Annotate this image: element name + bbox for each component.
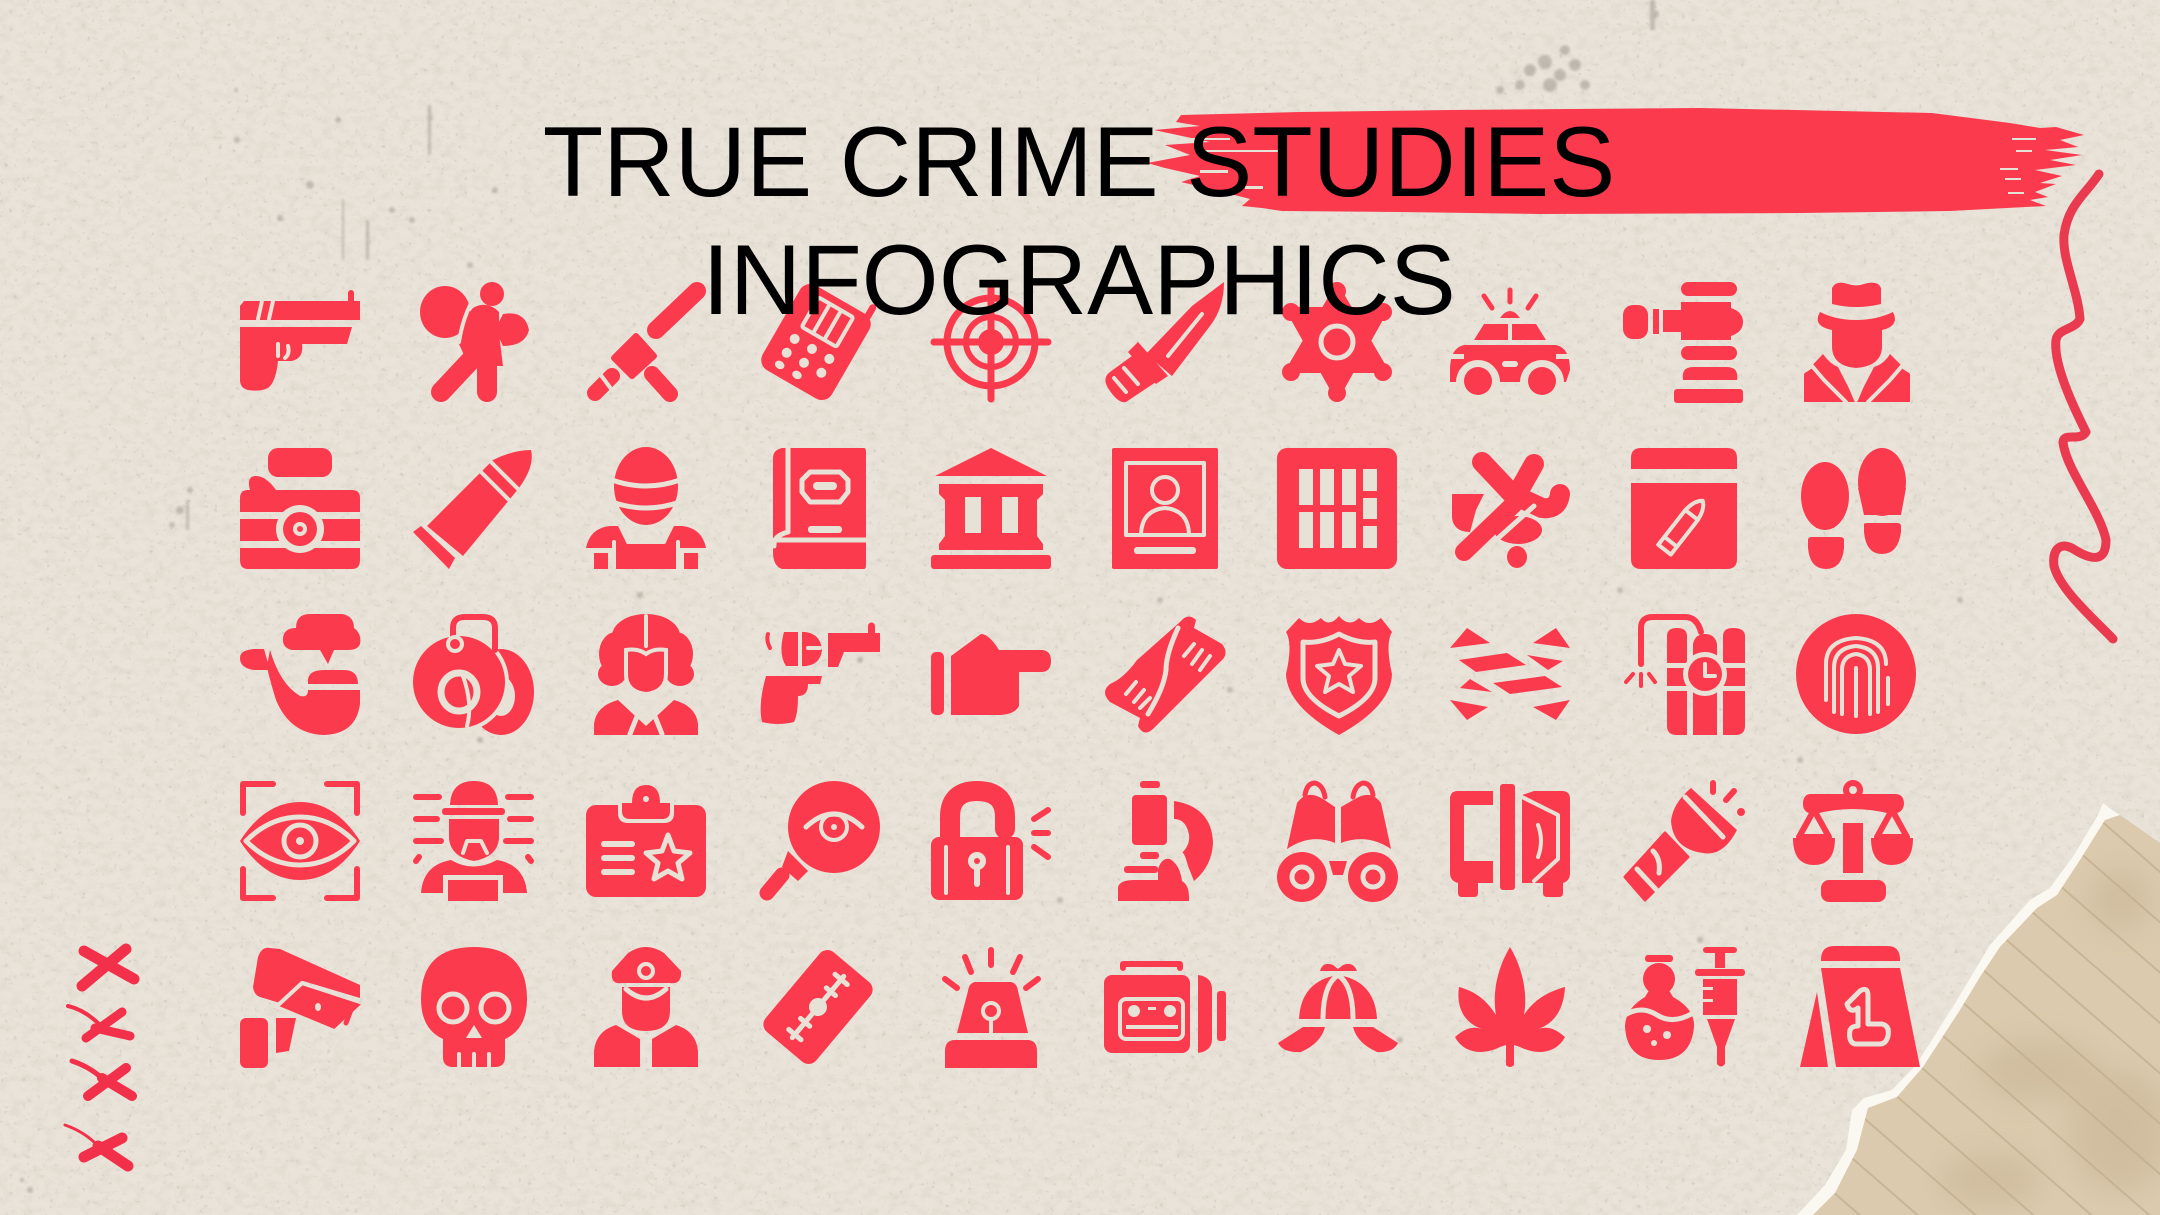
icon: judge with wig bbox=[594, 614, 698, 735]
icon: robber with sack bbox=[420, 282, 529, 392]
icon: rolled tape bbox=[1105, 616, 1226, 733]
icon: courthouse bank bbox=[931, 448, 1051, 569]
icon: crime scene tape bbox=[1450, 628, 1570, 720]
icon: alarm siren bbox=[945, 950, 1038, 1068]
icon: flashlight bbox=[1625, 783, 1745, 900]
icon: suspect portrait card bbox=[1112, 448, 1218, 569]
icon: microscope bbox=[1118, 781, 1213, 901]
icon: police baton bbox=[595, 291, 697, 394]
icon: camera bbox=[240, 448, 360, 569]
icon: footprints bbox=[1801, 448, 1906, 569]
icon: skull bbox=[421, 947, 527, 1067]
icon: jail cell bbox=[1277, 448, 1397, 569]
icon: police badge bbox=[1286, 616, 1392, 735]
icon: magnifier with eye bbox=[767, 781, 880, 893]
icon: open padlock bbox=[931, 791, 1048, 900]
red x marks bbox=[65, 949, 134, 1166]
icon: gavel bbox=[1623, 282, 1743, 403]
title: TRUE CRIME STUDIES bbox=[543, 106, 1615, 217]
icon: evidence bag with bullet bbox=[1631, 448, 1737, 569]
title bbox=[543, 106, 1615, 335]
icon: eye scan bbox=[240, 784, 360, 898]
icon: scales of justice bbox=[1793, 783, 1913, 902]
icon: open safe bbox=[1450, 784, 1570, 897]
icon: tobacco pipe and smoke bbox=[240, 614, 360, 735]
icon: law book bbox=[773, 448, 866, 569]
icon: evidence marker number one bbox=[1800, 946, 1920, 1067]
icon: razor blade bbox=[759, 946, 877, 1068]
torn notebook paper corner bbox=[1790, 800, 2160, 1215]
title brush stroke bbox=[1147, 108, 2084, 214]
icon: bullet bbox=[413, 450, 532, 569]
icon: security camera bbox=[240, 948, 360, 1068]
icon: binoculars bbox=[1277, 783, 1398, 902]
icon: detective bbox=[1804, 283, 1910, 402]
icon: detective hat bbox=[1278, 964, 1398, 1052]
icon: pistol bbox=[240, 290, 360, 391]
icon: clipboard with star bbox=[586, 785, 706, 897]
icon: knife bbox=[1105, 282, 1224, 402]
icon grid bbox=[240, 272, 1920, 1068]
icon: police car bbox=[1450, 290, 1570, 404]
title: INFOGRAPHICS bbox=[702, 224, 1456, 335]
icon: revolver bbox=[761, 622, 880, 724]
icon: potion flask and syringe bbox=[1625, 947, 1745, 1066]
icon: fleeing runner bbox=[1452, 462, 1560, 568]
icon: pointing hand bbox=[931, 634, 1051, 715]
icon: sheriff star bbox=[1282, 282, 1392, 402]
icon: crosshair target bbox=[934, 285, 1048, 399]
icon: cassette recorder bbox=[1104, 964, 1226, 1053]
icon: walkie talkie bbox=[757, 272, 880, 404]
icon: SWAT officer bbox=[586, 447, 706, 569]
icon: handcuffs bbox=[409, 617, 534, 735]
icon: suspect mugshot bbox=[416, 781, 531, 901]
icon: dynamite with timer bbox=[1626, 617, 1745, 735]
red squiggle line bbox=[2054, 174, 2113, 639]
icon: fingerprint bbox=[1796, 614, 1916, 734]
icon: police officer bbox=[594, 947, 698, 1067]
icon: cannabis leaf bbox=[1455, 947, 1565, 1067]
